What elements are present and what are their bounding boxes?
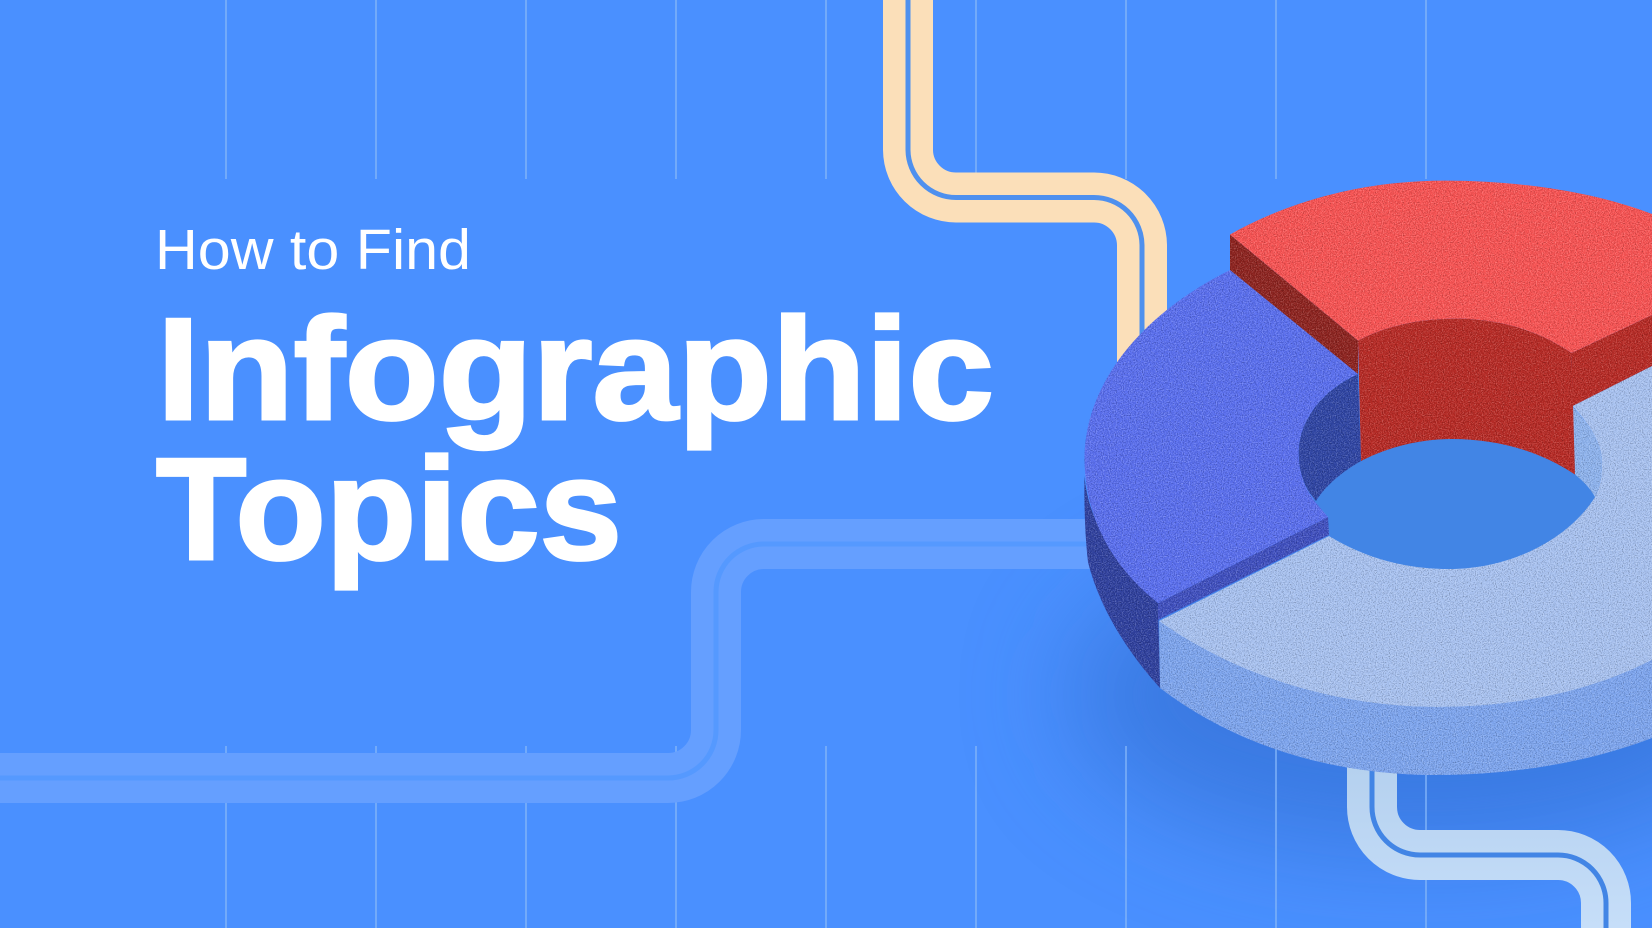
- pale segment inner wall: [1572, 406, 1602, 497]
- segment: red: [1230, 181, 1652, 474]
- indigo front face: [1158, 517, 1329, 620]
- connector: pale blue pipe: [1372, 740, 1606, 928]
- connector: cream pipe: [908, 0, 1142, 420]
- subtitle: How to Find: [155, 218, 471, 282]
- indigo outer side: [1084, 476, 1160, 688]
- donut drop shadow: [1070, 540, 1652, 850]
- segment: indigo: [1084, 270, 1361, 688]
- heading line one: Infographic: [157, 288, 994, 450]
- pale segment outer side: [1159, 621, 1652, 775]
- donut hole floor: [1313, 437, 1597, 571]
- title block: [155, 218, 994, 590]
- 3D donut chart: [1084, 181, 1652, 775]
- pale segment top face: [1159, 366, 1652, 707]
- connector: light blue pipe: [0, 544, 1120, 778]
- red top face: [1230, 181, 1652, 353]
- indigo inner wall: [1299, 374, 1361, 501]
- segment: pale blue: [1159, 366, 1652, 775]
- red left face: [1230, 234, 1358, 374]
- heading line two: Topics: [156, 428, 622, 590]
- indigo top face: [1084, 270, 1358, 603]
- red right face: [1572, 315, 1652, 406]
- red inner wall: [1358, 319, 1575, 474]
